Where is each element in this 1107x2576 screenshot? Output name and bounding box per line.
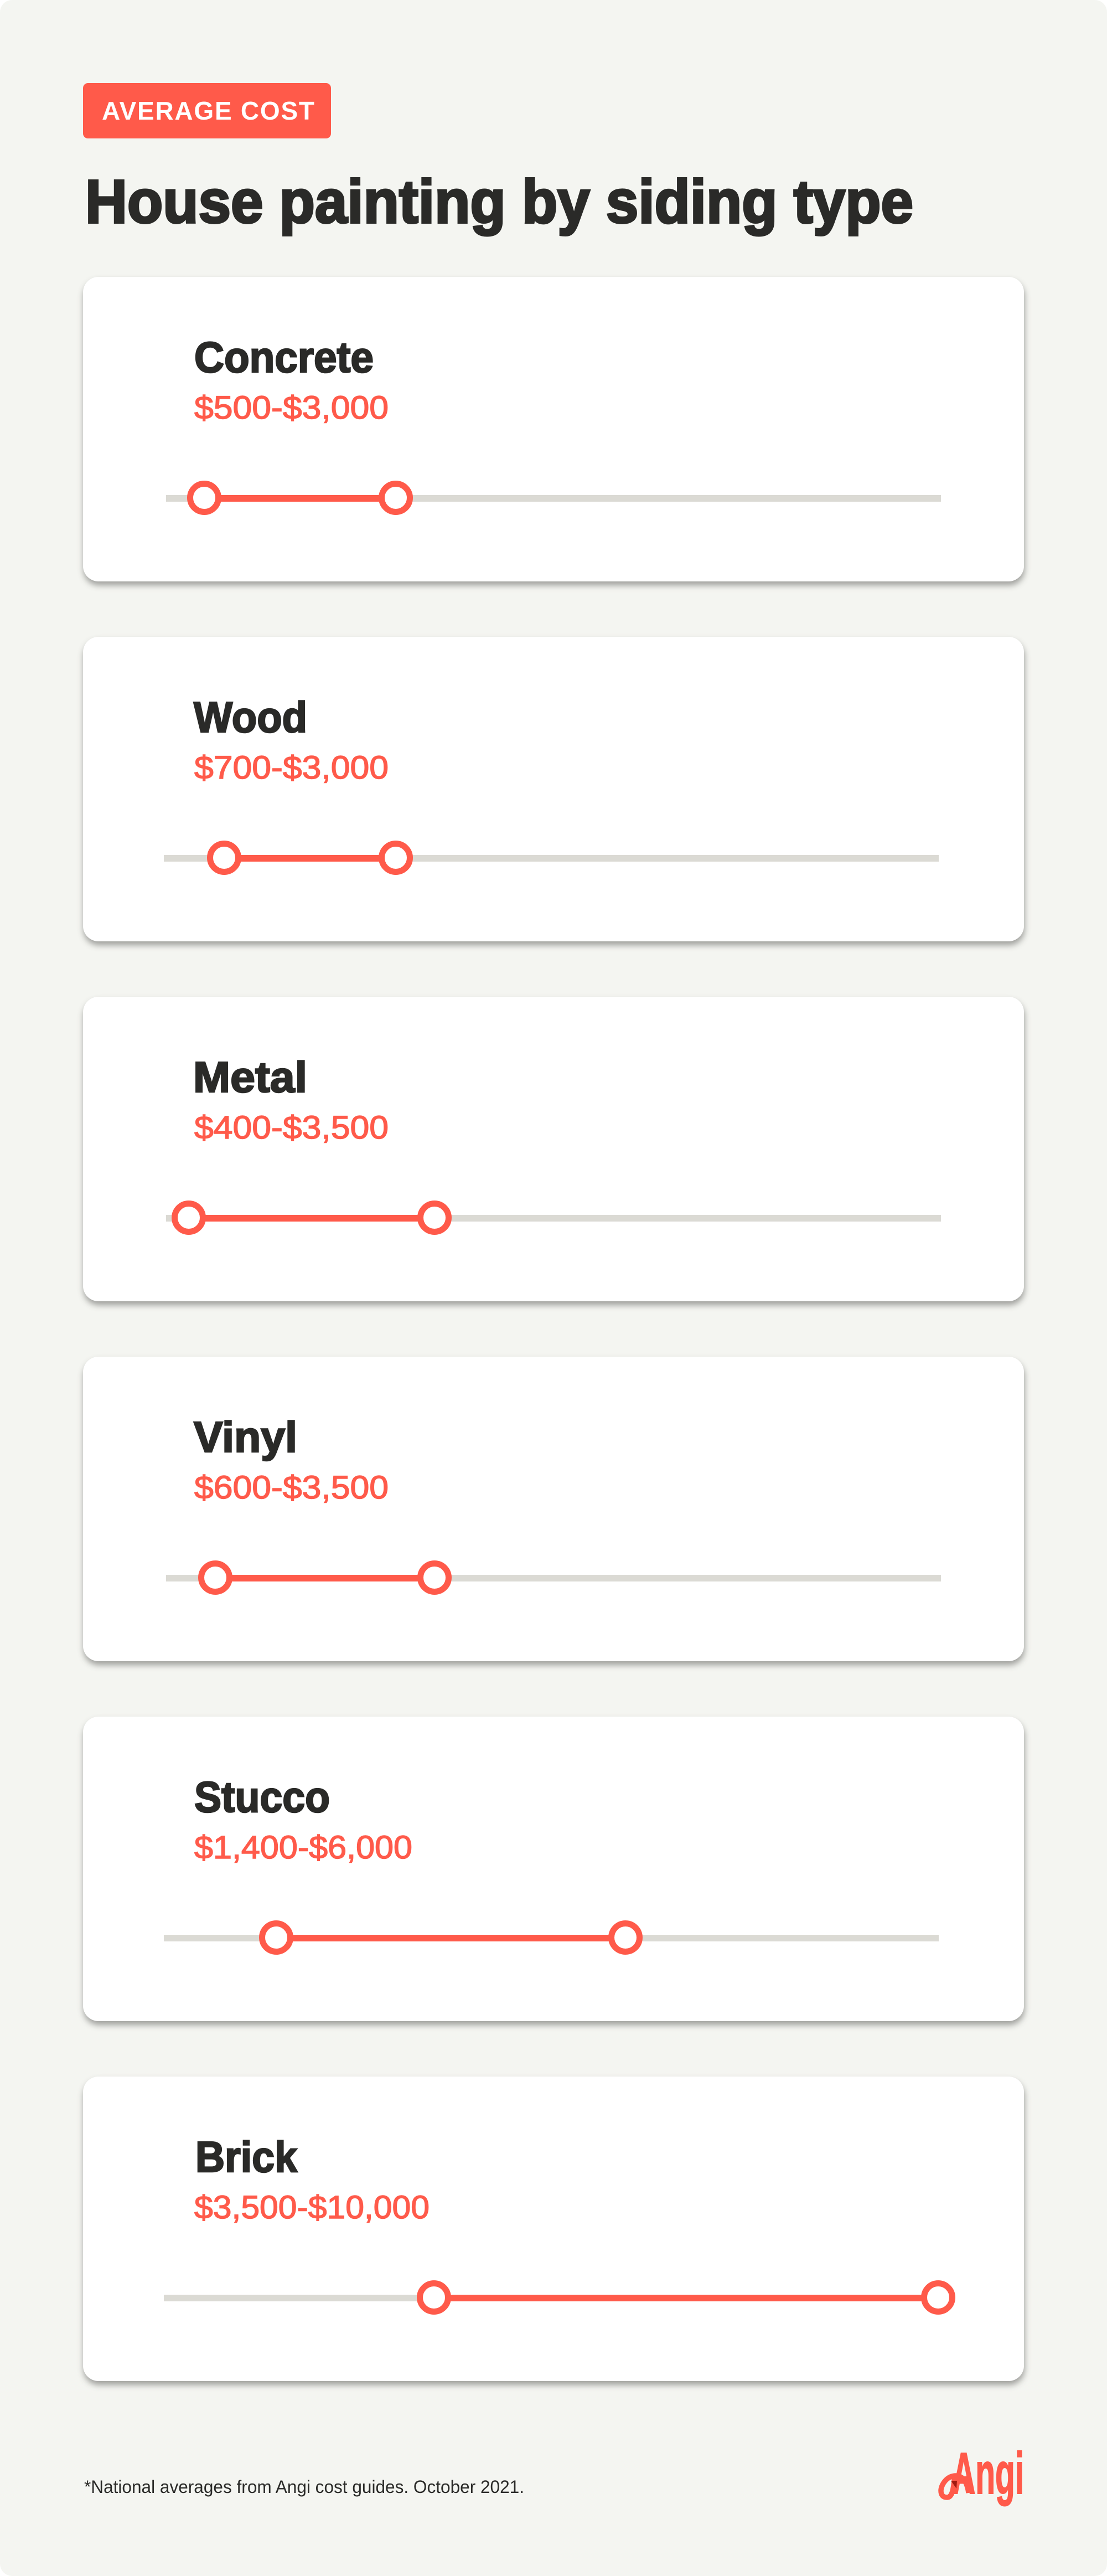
- title: House painting by siding type: [85, 168, 913, 236]
- heading: concrete: Concrete: [194, 333, 374, 382]
- price: vinyl: $600-$3,500: [194, 1470, 389, 1506]
- heading: metal: Metal: [193, 1053, 307, 1101]
- heading: wood: Wood: [194, 693, 307, 741]
- price: wood: $700-$3,000: [194, 750, 389, 786]
- range slider: vinyl: [166, 1564, 941, 1591]
- panel: stucco: [83, 1717, 1024, 2021]
- range slider: concrete: [166, 484, 941, 512]
- footnote: *National averages from Angi cost guides. October 2021.: [84, 2477, 524, 2497]
- panel: brick: [83, 2077, 1024, 2381]
- range slider: wood: [164, 844, 939, 872]
- price: stucco: $1,400-$6,000: [194, 1830, 412, 1866]
- heading: brick: Brick: [195, 2132, 298, 2181]
- badge: average cost: [83, 83, 331, 138]
- price: brick: $3,500-$10,000: [194, 2189, 430, 2225]
- logo: Angi: Angi: [952, 2441, 1024, 2506]
- heading: stucco: Stucco: [194, 1773, 330, 1821]
- logo: Angi: [941, 2441, 1024, 2506]
- badge: average cost: AVERAGE COST: [102, 96, 314, 125]
- panel: wood: [83, 637, 1024, 941]
- range slider: brick: [164, 2284, 952, 2311]
- price: concrete: $500-$3,000: [194, 390, 389, 426]
- panel: concrete: [83, 277, 1024, 581]
- range slider: metal: [166, 1204, 941, 1232]
- price: metal: $400-$3,500: [194, 1110, 389, 1146]
- heading: vinyl: Vinyl: [194, 1413, 297, 1461]
- panel: metal: [83, 997, 1024, 1301]
- panel: vinyl: [83, 1357, 1024, 1661]
- range slider: stucco: [164, 1924, 939, 1951]
